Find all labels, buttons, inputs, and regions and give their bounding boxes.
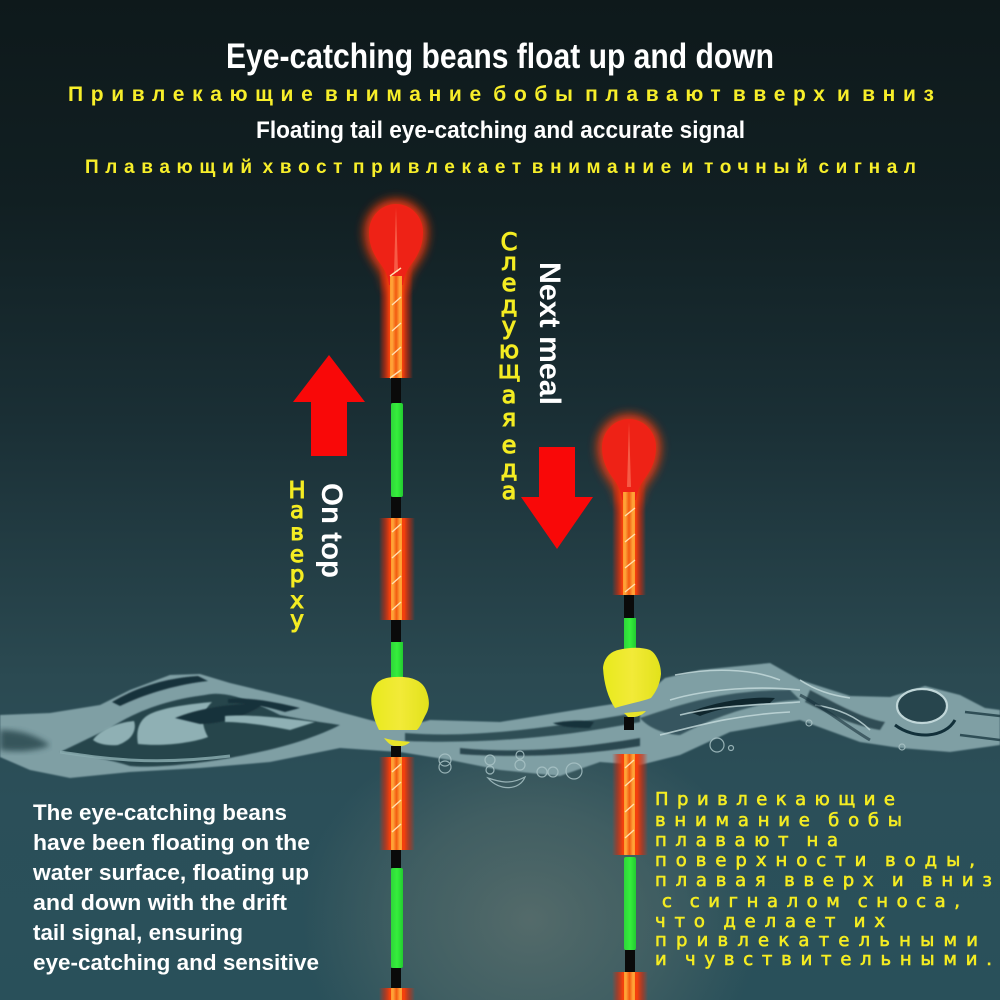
tip glow [602,419,656,500]
orange middle glow [379,518,415,620]
text block: Russian description: привлекательными [655,930,978,951]
text block: Russian description: Привлекающие [655,789,895,810]
left float upper stem and glowing tip [369,204,423,680]
light side blob [93,721,135,745]
label: On top: On top [315,483,348,578]
text block: Russian description: внимание бобы [655,810,902,831]
lower orange segment [624,754,635,855]
yellow bean [371,677,429,730]
text block: English description: The eye-catching beans [33,800,287,825]
text block: English description: eye-catching and sensitive [33,950,319,975]
red bulb [602,419,656,500]
orange tail segment [390,276,402,378]
bubble in wave [897,689,947,723]
dark crest lines [112,676,300,724]
centre dark folds [405,712,640,742]
orange tail body [612,477,646,595]
orange middle segment [391,518,402,620]
lower orange segment [391,757,402,850]
water surface wave [0,663,1000,778]
orange tail segment [623,492,635,595]
light centre blob [137,702,212,745]
text block: Russian description: с сигналом сноса, [662,891,960,912]
right float upper stem and glowing tip [602,419,656,650]
text block: English description: tail signal, ensuring [33,920,243,945]
title: Eye-catching beans float up and down [226,37,774,76]
right float bean and lower stem [603,648,661,1000]
green section [391,403,403,497]
text block: Russian description: плавая вверх и вниз [655,870,992,891]
green section [624,618,636,650]
black joint [391,378,401,403]
tip glow [369,204,423,285]
right dark folds [640,690,800,735]
text block: English description: and down with the drift [33,890,288,915]
orange tail body [379,262,413,378]
text block: English description: water surface, floating up [32,860,309,885]
subtitle: Russian title: Привлекающие внимание бобы плавают вверх и вниз [68,83,934,106]
black joint [624,595,634,618]
label: Наверху stacked: Наверху [288,478,306,633]
lower green section [624,857,636,950]
dark left mass [60,694,340,767]
underwater light glow [300,720,760,1000]
label: Next meal: Next meal [533,262,566,405]
small bubbles under the surface [439,720,905,788]
label: Следующая еда stacked: Следующая еда [498,228,520,505]
lower orange glow [379,757,415,850]
wave body [0,663,1000,778]
arrow: down [521,447,593,549]
light wave lines [660,670,870,735]
lower orange glow [612,754,648,855]
green lower section [391,642,403,680]
text block: Russian description: что делает их [655,911,885,932]
left float bean and lower stem [371,677,429,1000]
yellow bean [603,648,661,708]
text block: English description [32,800,319,975]
arrow: up [293,355,365,456]
subheading: Floating tail eye-catching and accurate signal [256,117,745,144]
text block: English description: have been floating on the [33,830,310,855]
text block: Russian description [655,789,992,970]
text block: Russian description: поверхности воды, [655,850,975,871]
text block: Russian description: плавают на [655,830,838,851]
red bulb [369,204,423,285]
subheading: Russian: Плавающий хвост привлекает внимание и точный сигнал [85,157,916,178]
text block: Russian description: и чувствительными. [655,949,992,970]
lower green section [391,868,403,968]
